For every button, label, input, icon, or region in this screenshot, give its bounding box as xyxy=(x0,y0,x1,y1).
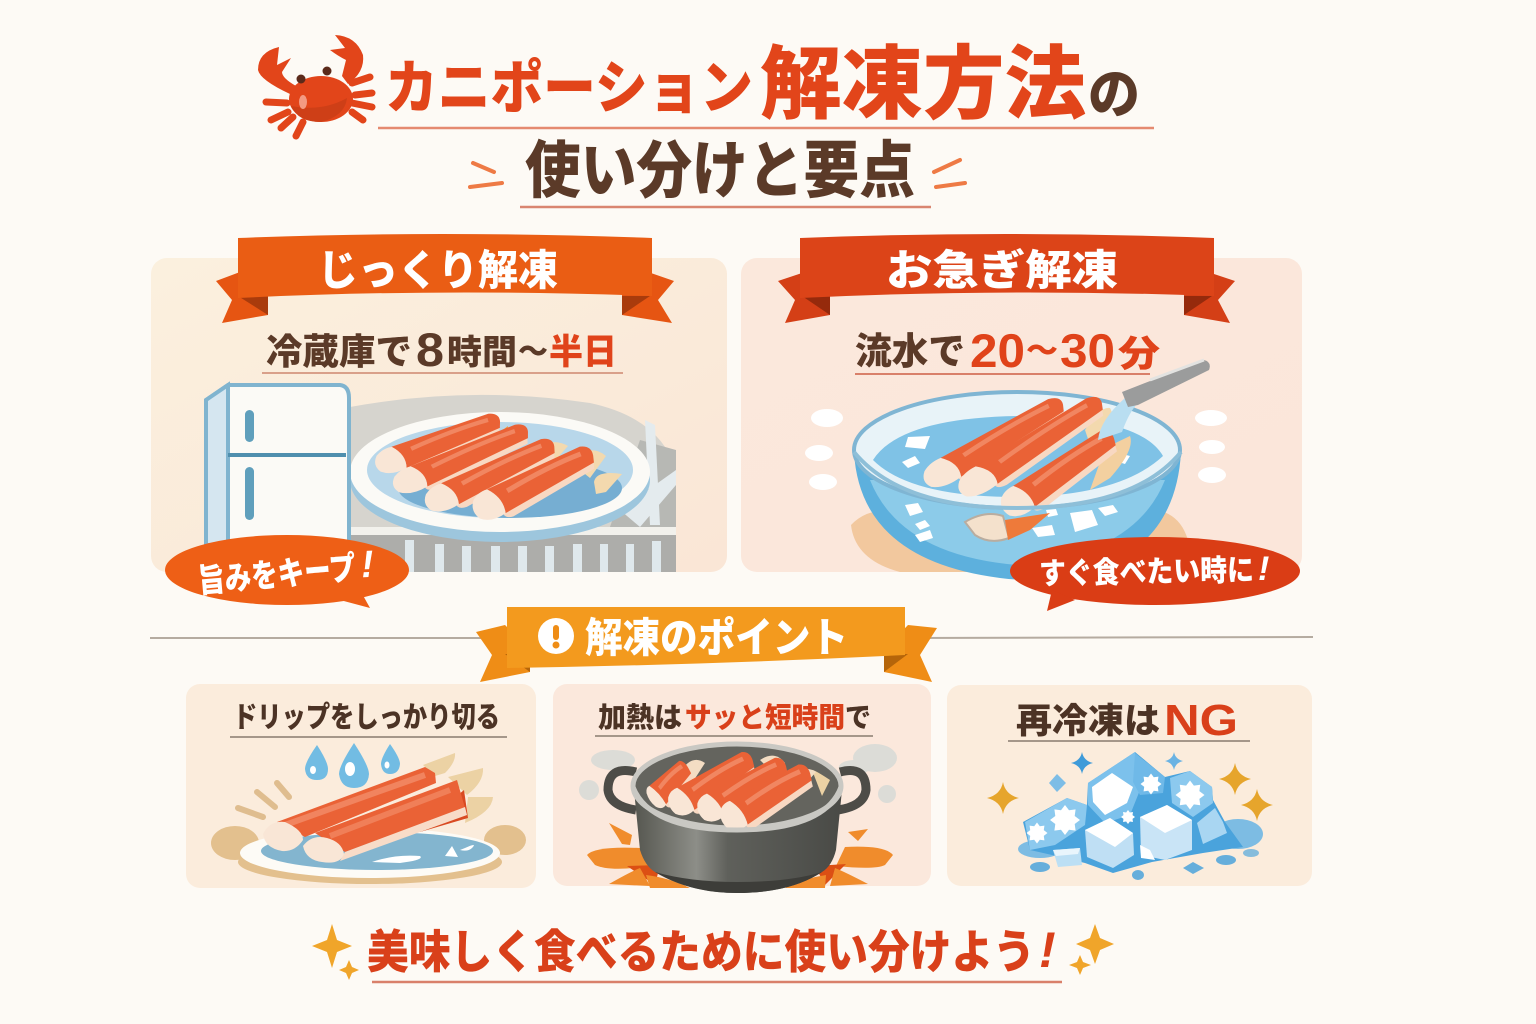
time label: 〜 xyxy=(518,336,548,369)
icon: crab xyxy=(258,35,372,136)
card: cut the drip xyxy=(186,684,536,888)
time label xyxy=(855,324,1160,377)
icon: refrigerator xyxy=(206,385,349,545)
icon: water drops xyxy=(305,743,400,788)
illustration: steam xyxy=(579,744,897,803)
callout: when in a hurry xyxy=(1010,537,1300,611)
title line 1: 解凍方法 xyxy=(760,40,1086,129)
ribbon: slow thaw xyxy=(216,234,674,323)
ribbon: thawing points: 解凍のポイント xyxy=(585,615,848,661)
callout: keep flavor: ! xyxy=(360,544,375,586)
card: heat briefly xyxy=(553,684,931,893)
icon: exclamation xyxy=(538,618,574,654)
card heading: ドリップをしっかり切る xyxy=(233,701,500,734)
footer message: 美味しく食べるために使い分けよう xyxy=(367,926,1035,978)
panel: quick thaw xyxy=(741,234,1302,611)
title block xyxy=(258,35,1154,207)
time label: 流水で xyxy=(855,331,965,372)
title line 1 xyxy=(385,40,1140,129)
time label: 冷蔵庫で xyxy=(266,331,412,372)
callout: when in a hurry: すぐ食べたい時に xyxy=(1039,554,1254,591)
ribbon: quick thaw: お急ぎ解凍 xyxy=(886,247,1118,294)
ribbon: quick thaw xyxy=(778,234,1235,323)
illustration: ice cubes xyxy=(1018,752,1263,880)
card: do not refreeze xyxy=(947,685,1312,886)
illustration: fridge shelf and plate xyxy=(350,395,676,572)
time label xyxy=(262,323,623,376)
illustration: flames xyxy=(587,823,893,888)
footer message: ! xyxy=(1039,922,1056,978)
callout: when in a hurry: ! xyxy=(1258,550,1269,588)
time label: 20 xyxy=(970,324,1025,377)
title line 2: 使い分けと要点 xyxy=(525,137,915,206)
ribbon: slow thaw: じっくり解凍 xyxy=(318,247,558,294)
card heading xyxy=(1008,696,1250,745)
illustration: bowl under running water xyxy=(805,360,1227,580)
time label: 〜 xyxy=(1026,335,1058,368)
time label: 分 xyxy=(1118,333,1160,374)
icon: sparkles xyxy=(987,752,1273,821)
card heading: サッと短時間 xyxy=(685,702,845,733)
card heading: 再冷凍は xyxy=(1016,702,1160,741)
card heading: NG xyxy=(1164,696,1238,745)
title line 1: の xyxy=(1088,65,1140,125)
time label: 半日 xyxy=(549,333,617,372)
panel: slow thaw xyxy=(151,234,727,608)
time label: 30 xyxy=(1060,324,1115,377)
icon: pot xyxy=(608,744,866,893)
callout: keep flavor: 旨みをキープ xyxy=(197,549,357,600)
time label: 8 xyxy=(416,323,444,376)
callout: keep flavor xyxy=(165,535,409,608)
accent ticks xyxy=(470,160,965,187)
icon: footer sparkles xyxy=(312,924,1114,980)
ribbon: thawing points xyxy=(476,607,937,682)
time label: 時間 xyxy=(447,334,517,372)
illustration: crab legs on a plate xyxy=(211,753,526,884)
card heading: 加熱は xyxy=(598,702,682,733)
card heading: で xyxy=(845,702,871,733)
section divider xyxy=(150,637,1313,638)
title line 1: カニポーション xyxy=(385,56,753,121)
card heading xyxy=(595,702,873,736)
